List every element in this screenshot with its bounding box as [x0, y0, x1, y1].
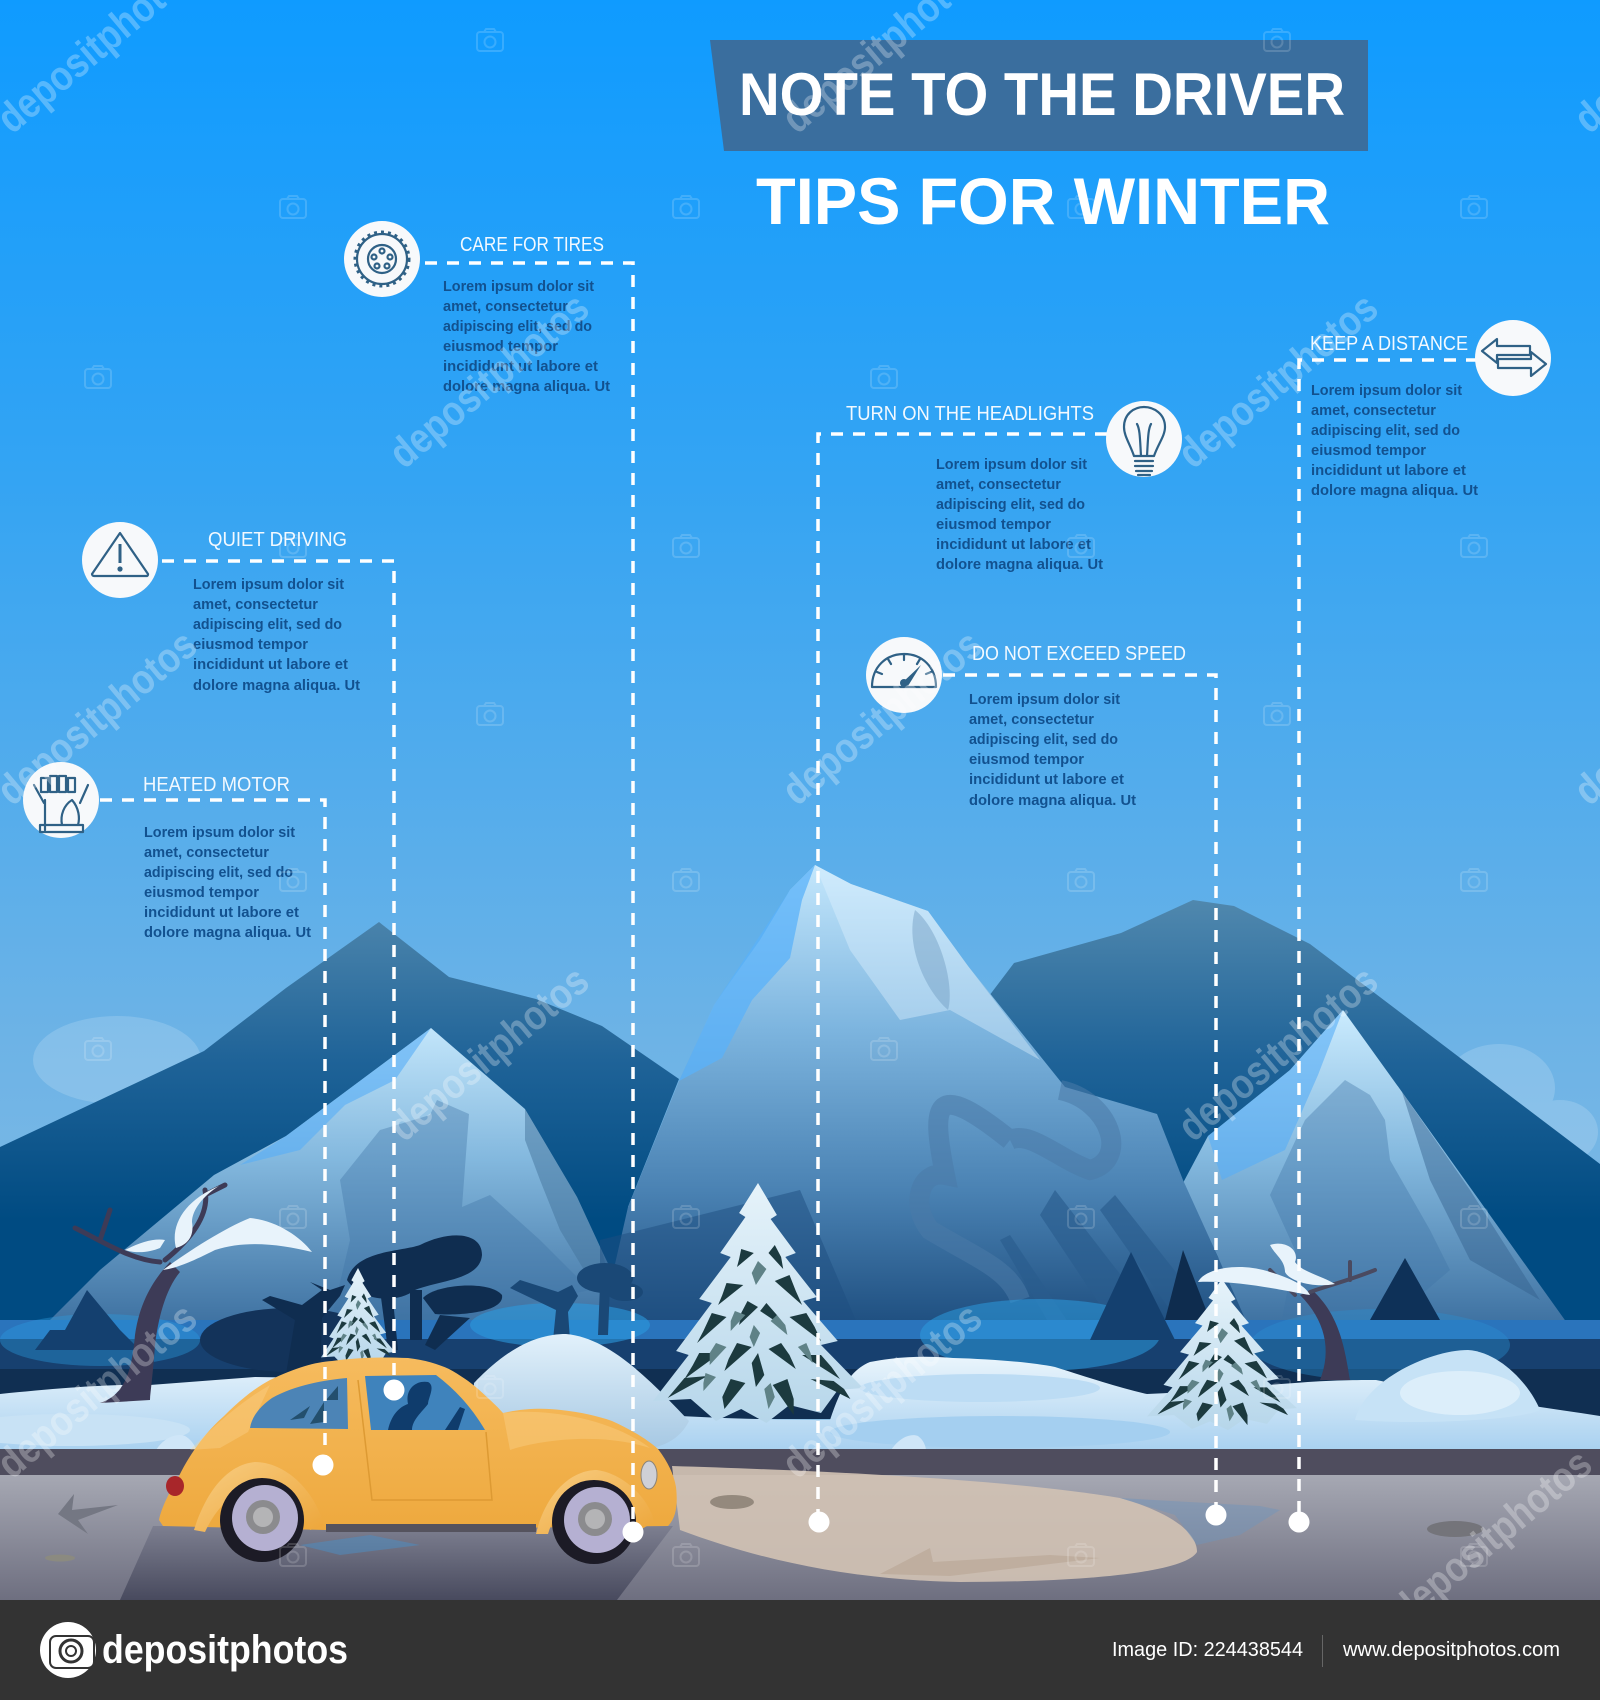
- text block: Lorem ipsum dolor sit: [936, 456, 1087, 473]
- text block: eiusmod tempor: [443, 338, 558, 355]
- tip: keep a distance: [1310, 320, 1551, 499]
- text block: [193, 576, 360, 694]
- subtitle: tips for winter: TIPS FOR WINTER: [756, 164, 1330, 238]
- road: dark kerb: [0, 1449, 1600, 1475]
- heading: HEATED MOTOR: [143, 773, 290, 796]
- heading: QUIET DRIVING: [208, 528, 347, 551]
- tip: care for tires: [344, 221, 610, 395]
- rear fender: [194, 1462, 324, 1532]
- text block: eiusmod tempor: [144, 884, 259, 901]
- rear window: [250, 1378, 348, 1429]
- text block: Lorem ipsum dolor sit: [144, 824, 295, 841]
- text block: incididunt ut labore et: [193, 656, 348, 673]
- text block: amet, consectetur: [193, 596, 318, 613]
- heading: TURN ON THE HEADLIGHTS: [846, 402, 1094, 425]
- mountain: left snowy peak: [40, 1028, 640, 1330]
- front wheel: [552, 1480, 636, 1564]
- text block: eiusmod tempor: [1311, 442, 1426, 459]
- front fender: [536, 1470, 654, 1534]
- diagonal watermarks: depositphotos: [1169, 956, 1386, 1150]
- tail light: [166, 1476, 184, 1496]
- footer logo text: depositphotos: [102, 1628, 348, 1672]
- text block: [1311, 382, 1478, 499]
- text block: eiusmod tempor: [936, 516, 1051, 533]
- diagonal watermarks: depositphotos: [773, 1293, 990, 1487]
- text block: amet, consectetur: [144, 844, 269, 861]
- spruce tree: left small: [321, 1268, 395, 1366]
- text block: amet, consectetur: [443, 298, 568, 315]
- watermark cameras: [85, 29, 1487, 1566]
- bare snowy tree: right: [1198, 1244, 1375, 1380]
- text block: eiusmod tempor: [969, 751, 1084, 768]
- text block: adipiscing elit, sed do: [969, 731, 1118, 748]
- mountain: far left dark: [0, 922, 679, 1330]
- text block: adipiscing elit, sed do: [144, 864, 293, 881]
- footer logo icon: [40, 1622, 96, 1678]
- headlight: [641, 1461, 657, 1489]
- dark conifers: [35, 1250, 1440, 1350]
- text block: Lorem ipsum dolor sit: [443, 278, 594, 295]
- icon: warning triangle: [82, 522, 158, 598]
- mountain: far right dark: [989, 900, 1600, 1330]
- text block: incididunt ut labore et: [936, 536, 1091, 553]
- door outline: [358, 1380, 492, 1500]
- diagonal watermarks: depositphotos: [1169, 283, 1386, 477]
- bare snowy tree: left: [75, 1185, 312, 1403]
- title ribbon: [710, 40, 1368, 151]
- headlight beam on road: [672, 1466, 1280, 1582]
- snow ground: [0, 1357, 1600, 1450]
- text block: adipiscing elit, sed do: [193, 616, 342, 633]
- snow mound: centre-left: [470, 1334, 689, 1449]
- footer image id: Image ID: 224438544: [1112, 1639, 1303, 1661]
- car underbody: [326, 1524, 536, 1532]
- car body: [159, 1357, 677, 1530]
- road surface: [0, 1475, 1600, 1600]
- connector: headlights: [818, 434, 1107, 1522]
- driver: [388, 1382, 465, 1430]
- text block: dolore magna aliqua. Ut: [1311, 482, 1478, 499]
- text block: Lorem ipsum dolor sit: [1311, 382, 1462, 399]
- diagonal watermarks: depositphotos: [380, 283, 597, 477]
- text block: Lorem ipsum dolor sit: [193, 576, 344, 593]
- spruce tree: right: [1147, 1279, 1297, 1430]
- spruce tree: centre large: [653, 1183, 863, 1423]
- icon: opposing arrows: [1475, 320, 1551, 396]
- connector: care for tires: [425, 263, 633, 1532]
- text block: [144, 824, 311, 941]
- text block: incididunt ut labore et: [443, 358, 598, 375]
- clouds: [33, 1016, 1598, 1164]
- front window: [365, 1375, 485, 1430]
- connector: speed: [943, 675, 1216, 1515]
- snow lumps: [152, 1435, 926, 1461]
- connector: quiet driving: [162, 561, 394, 1390]
- lake bands: [0, 1299, 1600, 1419]
- icon: speedometer: [866, 637, 942, 713]
- icon: tire: [344, 221, 420, 297]
- snow mound: right: [1355, 1350, 1540, 1422]
- heading: DO NOT EXCEED SPEED: [972, 642, 1186, 665]
- footer url: www.depositphotos.com: [1342, 1639, 1560, 1661]
- text block: incididunt ut labore et: [144, 904, 299, 921]
- text block: adipiscing elit, sed do: [936, 496, 1085, 513]
- road marks: [45, 1494, 1483, 1562]
- diagonal watermarks: depositphotos: [773, 620, 990, 814]
- text block: [969, 691, 1136, 809]
- snow drift shading: [0, 1374, 1170, 1448]
- text block: dolore magna aliqua. Ut: [443, 378, 610, 395]
- body highlight: [190, 1385, 650, 1450]
- title: note to the driver: NOTE TO THE DRIVER: [739, 61, 1345, 128]
- icon: light bulb: [1106, 401, 1182, 477]
- yellow car: [159, 1357, 677, 1564]
- text block: adipiscing elit, sed do: [1311, 422, 1460, 439]
- icon: heated seat: [23, 762, 99, 838]
- mountain: central large peak: [600, 865, 1250, 1330]
- text block: [936, 456, 1103, 573]
- connector: distance: [1299, 360, 1478, 1522]
- connector end dots: [312, 1380, 1310, 1542]
- text block: Lorem ipsum dolor sit: [969, 691, 1120, 708]
- text block: dolore magna aliqua. Ut: [969, 792, 1136, 809]
- diagonal watermarks: depositphotos: [380, 956, 597, 1150]
- text block: eiusmod tempor: [193, 636, 308, 653]
- text block: dolore magna aliqua. Ut: [144, 924, 311, 941]
- text block: [443, 278, 610, 395]
- text block: incididunt ut labore et: [1311, 462, 1466, 479]
- text block: incididunt ut labore et: [969, 771, 1124, 788]
- car shadow on road: [120, 1526, 673, 1600]
- text block: amet, consectetur: [936, 476, 1061, 493]
- tip: do not exceed speed: [866, 637, 1186, 809]
- tip: turn on the headlights: [846, 401, 1182, 573]
- silhouette trees: [262, 1235, 643, 1380]
- connector: heated motor: [100, 800, 325, 1465]
- footer bar: [0, 1600, 1600, 1700]
- mountain: right snowy peak: [1183, 1010, 1572, 1330]
- text block: dolore magna aliqua. Ut: [936, 556, 1103, 573]
- tip: heated motor: [23, 762, 311, 941]
- heading: CARE FOR TIRES: [460, 233, 604, 256]
- tip: quiet driving: [82, 522, 360, 694]
- text block: amet, consectetur: [969, 711, 1094, 728]
- footer divider: [1322, 1635, 1323, 1667]
- text block: dolore magna aliqua. Ut: [193, 677, 360, 694]
- text block: amet, consectetur: [1311, 402, 1436, 419]
- text block: adipiscing elit, sed do: [443, 318, 592, 335]
- heading: KEEP A DISTANCE: [1310, 332, 1468, 355]
- rear wheel: [220, 1478, 304, 1562]
